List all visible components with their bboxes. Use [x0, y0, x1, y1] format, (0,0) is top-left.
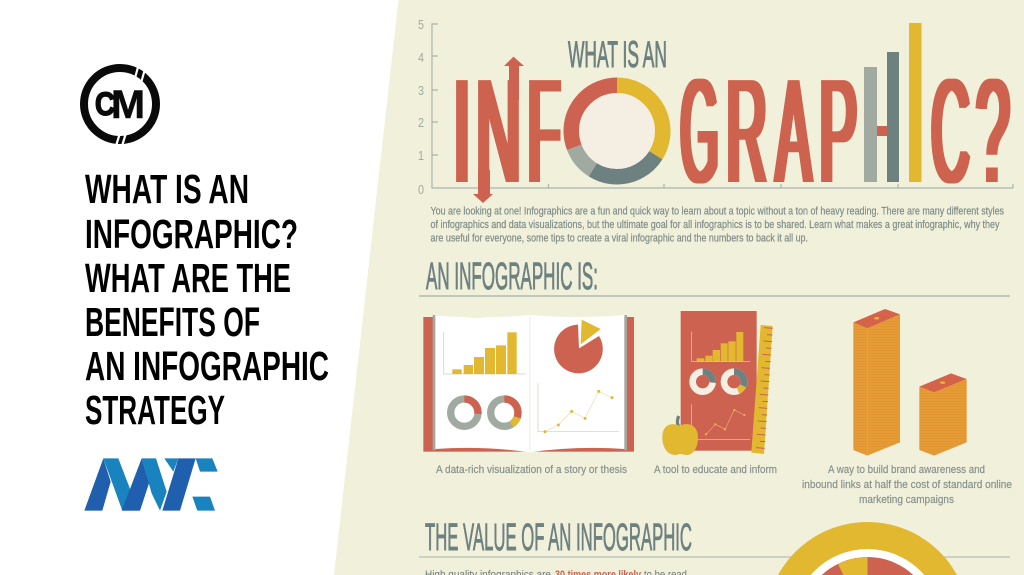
heading: main title: AN INFOGRAPHIC [85, 343, 329, 389]
chart axes [418, 17, 1013, 197]
heading: main title: WHAT IS AN [85, 166, 249, 212]
heading: main title: WHAT ARE THE [85, 255, 291, 301]
bar chart [692, 332, 750, 362]
heading: infographic title: A [776, 47, 811, 214]
caption: brand awareness: A way to build brand awareness and [828, 464, 985, 476]
panel: infographic content: THE VALUE OF AN INFOGRAPHIC [425, 517, 692, 559]
heading: infographic title: I [454, 49, 470, 213]
chart: donut as letter O [571, 85, 663, 177]
caption: brand awareness [802, 464, 1012, 506]
donut charts [451, 399, 518, 426]
heading: infographic title: C [931, 47, 969, 214]
icon: MTC logo [84, 458, 218, 511]
panel: white title side [0, 0, 398, 575]
line chart [538, 383, 619, 433]
tall stack [853, 309, 900, 456]
caption: tool to educate: A tool to educate and inform [654, 464, 777, 476]
chart: value pie [766, 522, 970, 575]
illustration: stacks of money [853, 309, 967, 456]
text block: introduction [430, 206, 1004, 244]
chart axes: 3 [418, 83, 424, 98]
heading: infographic title: ? [976, 49, 1010, 213]
icon: CM logo [84, 66, 156, 146]
icon: CM logo: C [95, 86, 115, 122]
arrow: up from N [504, 57, 524, 100]
chart axes: 4 [418, 50, 424, 65]
icon: ruler [751, 325, 773, 454]
heading: infographic title: P [820, 48, 857, 214]
chart axes: 5 [418, 17, 424, 32]
text block: introduction: are useful for everyone, some tips to create a viral infographic and the numbers to back it all up. [430, 232, 808, 244]
pie chart [554, 320, 603, 373]
heading: main title: STRATEGY [85, 387, 225, 433]
bar chart [443, 332, 526, 374]
illustration: red book, ruler and apple [662, 311, 773, 455]
illustration: open book with charts [423, 315, 634, 452]
chart axes: 1 [418, 148, 424, 163]
arrow: down from N [473, 170, 493, 203]
chart axes: 2 [418, 115, 424, 130]
heading: infographic title [454, 47, 1010, 215]
icon: apple [662, 416, 698, 455]
chart axes: 0 [418, 182, 424, 197]
icon: CM logo: M [111, 83, 145, 127]
panel: infographic content [418, 17, 1013, 575]
chart: bars as letters H and I [864, 23, 922, 182]
panel: infographic content: AN INFOGRAPHIC IS: [426, 256, 598, 298]
caption: brand awareness: marketing campaigns [859, 494, 954, 506]
caption: data-rich visualization: A data-rich visualization of a story or thesis [436, 464, 627, 476]
heading: infographic title: R [726, 48, 767, 214]
heading: infographic title: F [528, 48, 560, 214]
heading: infographic title: N [476, 49, 521, 215]
heading: infographic title: G [681, 49, 718, 214]
heading: main title: INFOGRAPHIC? [85, 211, 298, 257]
short stack [919, 373, 967, 456]
donut charts [693, 372, 744, 392]
line chart [692, 404, 750, 439]
text block: value statement [425, 569, 687, 575]
heading: main title: BENEFITS OF [85, 299, 260, 345]
heading: main title [85, 166, 329, 433]
panel: infographic content: WHAT IS AN [568, 34, 667, 75]
